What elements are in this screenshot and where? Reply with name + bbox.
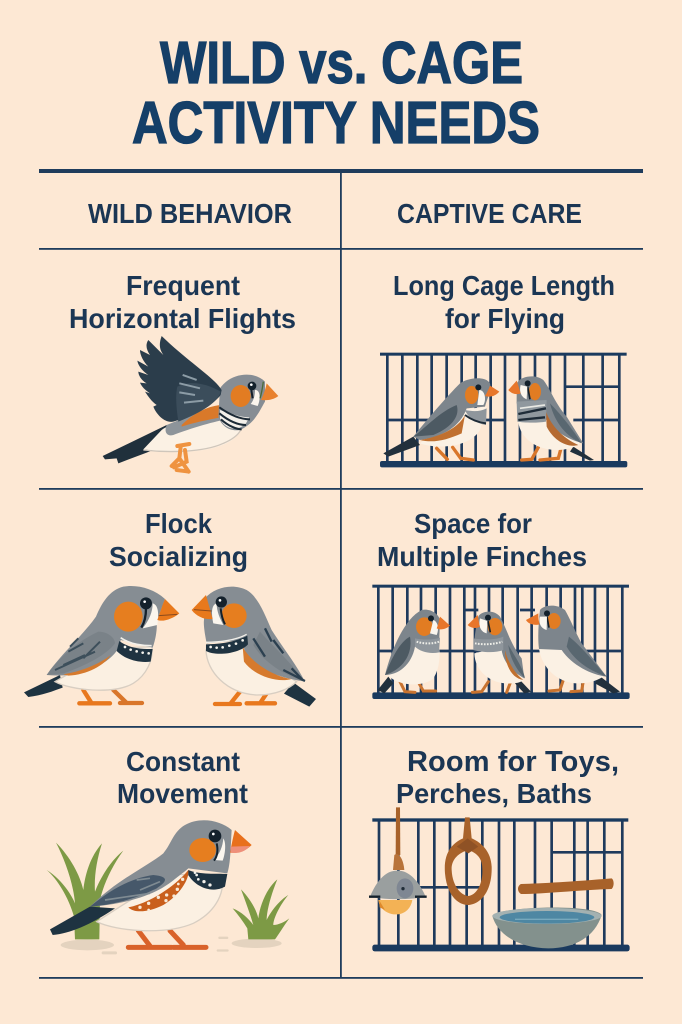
title: WILD vs. CAGE bbox=[160, 30, 523, 96]
body bbox=[97, 873, 223, 931]
cage bars bbox=[387, 354, 619, 464]
heading: room for toys, perches, baths bbox=[396, 746, 619, 809]
finch right bbox=[508, 376, 594, 461]
heading: space for multiple finches: Multiple Finches bbox=[377, 541, 587, 572]
title bbox=[132, 30, 540, 156]
heading: space for multiple finches bbox=[377, 508, 587, 572]
finch three bbox=[526, 606, 620, 693]
finch two bbox=[468, 612, 531, 693]
finch right bbox=[192, 587, 316, 707]
finch left bbox=[383, 378, 499, 460]
heading: long cage length: for Flying bbox=[445, 303, 565, 334]
illustration: finch on ground with grass bbox=[47, 820, 289, 954]
toy: hanging bell bbox=[369, 807, 427, 914]
face bbox=[189, 838, 216, 862]
heading: flock socializing: Socializing bbox=[109, 541, 248, 572]
cage bars bbox=[379, 820, 622, 948]
grass left bbox=[47, 843, 123, 939]
water bath bbox=[492, 908, 602, 948]
illustration: two finches socializing bbox=[24, 586, 316, 707]
heading: flock socializing: Flock bbox=[145, 508, 212, 539]
title: ACTIVITY NEEDS bbox=[132, 90, 540, 156]
legs bbox=[128, 931, 206, 947]
heading: room for toys, perches, baths: Room for Toys, bbox=[407, 746, 619, 778]
heading: constant movement bbox=[117, 746, 248, 809]
illustration: two finches in long cage bbox=[380, 353, 627, 467]
finch one bbox=[378, 610, 450, 693]
heading: constant movement: Constant bbox=[126, 746, 240, 777]
toy: rope ring bbox=[445, 817, 492, 905]
heading: flock socializing bbox=[109, 508, 248, 572]
back bbox=[90, 820, 232, 907]
grass right bbox=[233, 879, 289, 939]
ground patches bbox=[61, 937, 282, 954]
illustration: cage with toys, perch and bath bbox=[369, 807, 630, 951]
heading: constant movement: Movement bbox=[117, 778, 248, 809]
column heading: wild behavior: WILD BEHAVIOR bbox=[88, 198, 292, 229]
heading: space for multiple finches: Space for bbox=[414, 508, 532, 539]
icon: flying finch bbox=[103, 336, 278, 472]
tail bbox=[50, 907, 115, 935]
finch left bbox=[24, 586, 179, 703]
illustration: three finches in cage bbox=[372, 585, 630, 699]
heading: frequent horizontal flights: Horizontal Flights bbox=[69, 303, 296, 334]
perch bbox=[518, 878, 614, 894]
heading: frequent horizontal flights bbox=[69, 270, 296, 334]
bib bbox=[188, 870, 227, 890]
column heading: captive care: CAPTIVE CARE bbox=[397, 198, 582, 229]
heading: long cage length bbox=[393, 270, 615, 334]
heading: frequent horizontal flights: Frequent bbox=[126, 270, 240, 301]
cage bars bbox=[378, 586, 622, 696]
heading: long cage length: Long Cage Length bbox=[393, 270, 615, 301]
heading: room for toys, perches, baths: Perches, Baths bbox=[396, 778, 592, 809]
